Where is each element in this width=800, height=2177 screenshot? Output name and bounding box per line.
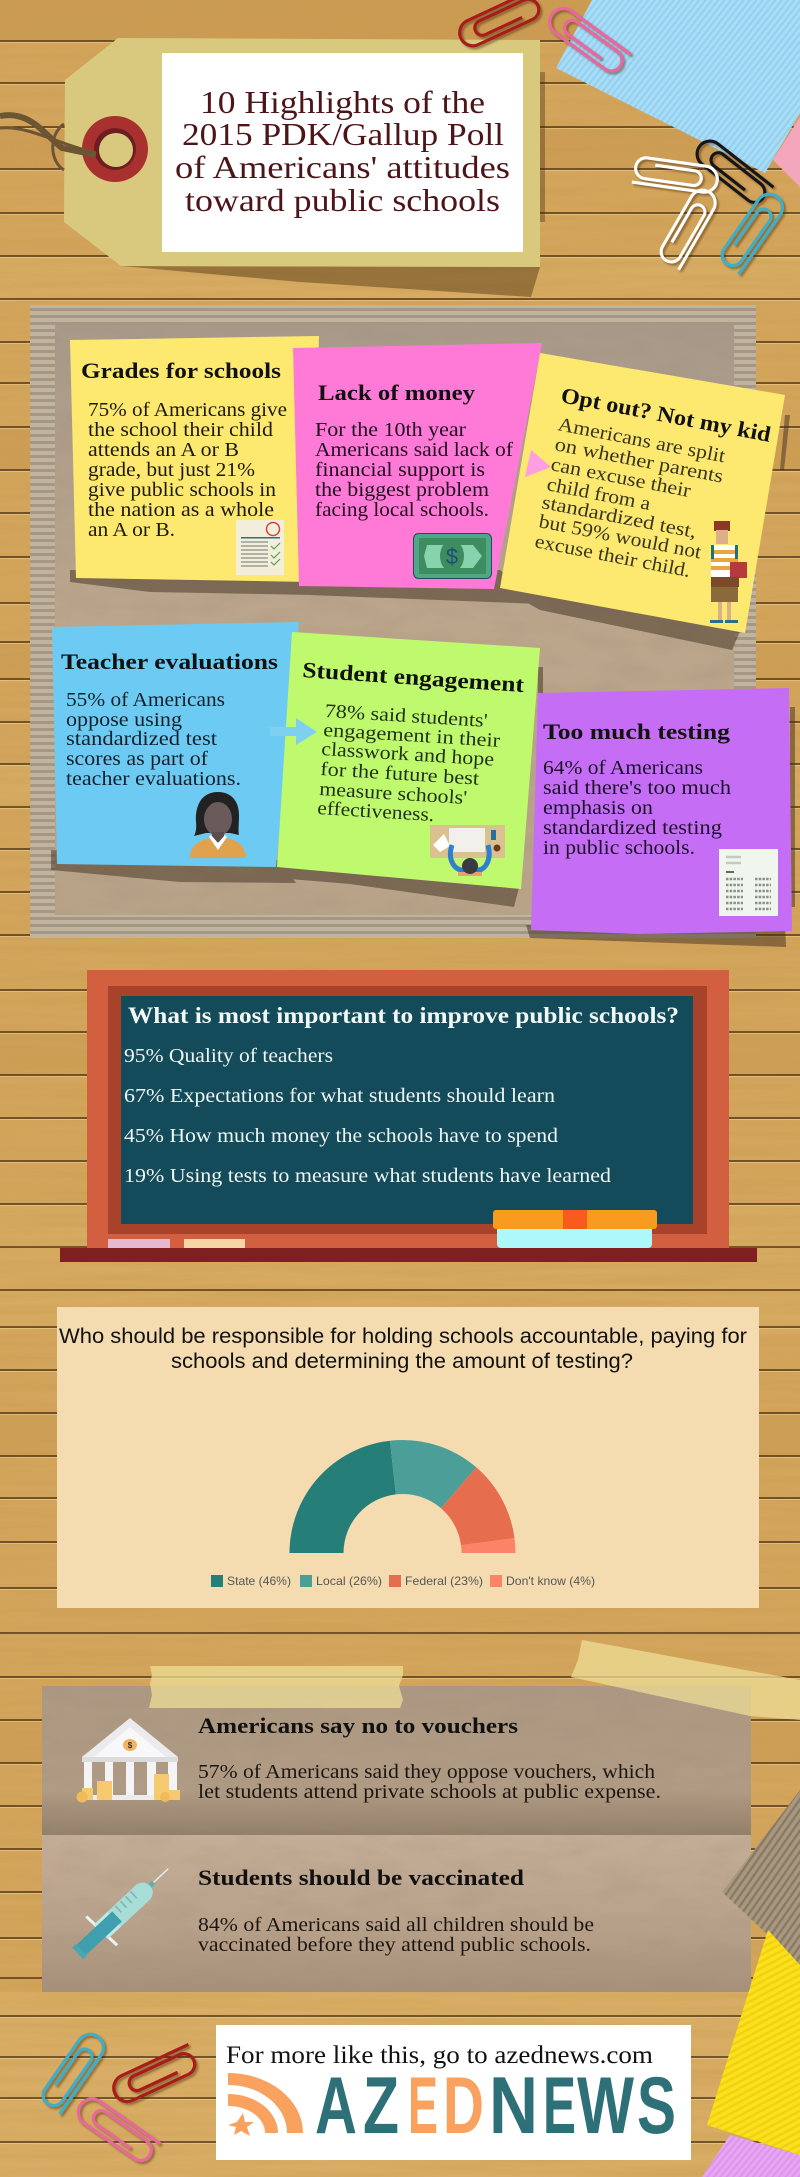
panel: azednews footer <box>216 2025 691 2160</box>
note: too much testing: in public schools. <box>543 838 695 859</box>
arrow: blue connector <box>270 718 317 745</box>
chart title: Who should be responsible for holding schools accountable, paying for <box>59 1325 747 1348</box>
logo: azednews wordmark: W <box>577 2061 634 2151</box>
note: grades for schools: grade, but just 21% <box>88 460 255 481</box>
note: grades for schools: attends an A or B <box>88 440 239 461</box>
tape strips <box>149 1640 800 1720</box>
note: opt out: child from a <box>545 474 652 515</box>
voucher text: 57% of Americans said they oppose vouchers, which <box>198 1762 655 1783</box>
panel: folded paper <box>42 1640 800 1992</box>
arrow: pink connector <box>525 450 551 477</box>
logo: azednews wordmark: E <box>543 2061 576 2151</box>
title text <box>175 84 510 218</box>
logo: azednews wordmark: E <box>408 2061 438 2151</box>
icon: bank building <box>76 1718 180 1802</box>
icon: teacher <box>190 792 246 858</box>
note: opt out: on whether parents <box>553 434 725 488</box>
brown yellow purple corner papers <box>702 1790 800 2177</box>
icon: bank building: $ <box>128 1741 133 1750</box>
note: teacher evaluations: oppose using <box>66 710 182 731</box>
chart legend: Local (26%) <box>316 1574 382 1588</box>
paper clips top <box>455 0 788 274</box>
note: teacher evaluations: teacher evaluations. <box>66 769 241 790</box>
title white card <box>162 53 523 252</box>
note: grades for schools: the nation as a whole <box>88 500 274 521</box>
chart legend: Don't know (4%) <box>506 1574 595 1588</box>
note: grades for schools: 75% of Americans give <box>88 400 287 421</box>
note: grades for schools: an A or B. <box>88 520 175 541</box>
note: opt out: but 59% would not <box>537 511 704 564</box>
luggage tag title card <box>0 38 545 297</box>
half donut chart <box>289 1440 516 1553</box>
paper clips bottom <box>38 2029 200 2166</box>
chalkboard list: 45% How much money the schools have to spend <box>124 1125 558 1147</box>
note: teacher evaluations: standardized test <box>66 729 218 750</box>
title text: toward public schools <box>185 182 500 218</box>
note: too much testing: emphasis on <box>543 798 653 819</box>
icon: answer sheet <box>719 849 778 916</box>
vaccine text <box>198 1865 594 1956</box>
note: student engagement: engagement in their <box>323 720 501 752</box>
note: teacher evaluations: Teacher evaluations <box>61 649 279 674</box>
note: student engagement: measure schools' <box>319 779 468 809</box>
note: grades for schools: the school their child <box>88 420 273 441</box>
chalkboard list <box>124 1045 611 1187</box>
note: opt out: standardized test, <box>540 492 698 543</box>
chalkboard list: 67% Expectations for what students should learn <box>124 1085 555 1107</box>
vaccine text: Students should be vaccinated <box>198 1865 524 1890</box>
panel: responsibility chart <box>57 1307 759 1608</box>
title text: 10 Highlights of the <box>200 84 485 120</box>
title text: 2015 PDK/Gallup Poll <box>182 116 504 152</box>
note: student engagement: for the future best <box>320 759 480 790</box>
chalk sticks <box>108 1239 245 1248</box>
note: lack of money: Americans said lack of <box>315 440 514 461</box>
icon: student at desk <box>430 825 505 876</box>
note: opt out: can excuse their <box>549 454 693 502</box>
panel: chalkboard <box>60 970 757 1262</box>
logo: azednews wordmark: Z <box>363 2061 399 2151</box>
note: opt out: Americans are split <box>556 414 728 467</box>
note: student engagement: classwork and hope <box>321 739 495 771</box>
voucher text: Americans say no to vouchers <box>198 1713 518 1738</box>
note: student engagement: 78% said students' <box>324 701 488 732</box>
note shadows <box>51 415 795 947</box>
icon: dollar bill: $ <box>446 544 458 569</box>
note: student engagement: effectiveness. <box>317 798 435 826</box>
icon: dollar bill <box>414 534 492 578</box>
tag eyelet and string <box>0 115 148 182</box>
panel: corkboard notes <box>30 305 795 947</box>
note: opt out: Opt out? Not my kid <box>559 382 773 447</box>
chart title <box>59 1325 747 1373</box>
voucher text: let students attend private schools at public expense. <box>198 1782 661 1803</box>
note: teacher evaluations <box>52 622 299 867</box>
note: too much testing: Too much testing <box>543 719 730 744</box>
eraser <box>493 1210 657 1248</box>
chalkboard list: 19% Using tests to measure what students have learned <box>124 1165 611 1187</box>
icon: syringe <box>63 1853 183 1969</box>
note: grades for schools: Grades for schools <box>81 358 281 383</box>
note: too much testing: said there's too much <box>543 778 731 799</box>
note: too much testing: 64% of Americans <box>543 758 703 779</box>
note: grades for schools: give public schools in <box>88 480 276 501</box>
note: opt out: excuse their child. <box>533 531 692 582</box>
logo: azednews wordmark <box>315 2061 676 2151</box>
chart legend: State (46%) <box>227 1574 291 1588</box>
footer text: For more like this, go to azednews.com <box>226 2042 654 2069</box>
chalkboard heading: What is most important to improve public schools? <box>128 1003 679 1028</box>
logo: rss icon <box>228 2073 303 2136</box>
note: lack of money: Lack of money <box>318 380 475 405</box>
note: lack of money: financial support is <box>315 460 485 481</box>
logo: azednews wordmark: A <box>315 2061 357 2151</box>
note: too much testing: standardized testing <box>543 818 722 839</box>
note: teacher evaluations: 55% of Americans <box>66 690 225 711</box>
note: teacher evaluations: scores as part of <box>66 749 209 770</box>
note: student engagement: Student engagement <box>302 657 526 697</box>
logo: azednews wordmark: D <box>443 2061 484 2151</box>
title text: of Americans' attitudes <box>175 149 510 185</box>
note: lack of money: the biggest problem <box>315 480 489 501</box>
chart legend: Federal (23%) <box>405 1574 483 1588</box>
chalkboard list: 95% Quality of teachers <box>124 1045 333 1067</box>
vaccine text: vaccinated before they attend public schools. <box>198 1935 591 1956</box>
vaccine text: 84% of Americans said all children should be <box>198 1915 594 1936</box>
note: lack of money: facing local schools. <box>315 500 489 521</box>
voucher text <box>198 1713 661 1803</box>
note: lack of money: For the 10th year <box>315 420 467 441</box>
icon: graded test paper <box>236 520 284 575</box>
note: lack of money <box>293 343 542 589</box>
blue and pink paper corner <box>556 0 800 187</box>
icon: pixel student <box>710 521 747 623</box>
note: opt out <box>500 353 785 633</box>
chart title: schools and determining the amount of testing? <box>171 1350 633 1373</box>
logo: azednews wordmark: S <box>637 2061 676 2151</box>
chalk ledge <box>60 1248 757 1262</box>
note: grades for schools <box>70 336 319 582</box>
note: too much testing <box>531 688 792 934</box>
logo: azednews wordmark: N <box>489 2061 538 2151</box>
chart legend <box>211 1574 595 1588</box>
note: student engagement <box>270 632 540 889</box>
